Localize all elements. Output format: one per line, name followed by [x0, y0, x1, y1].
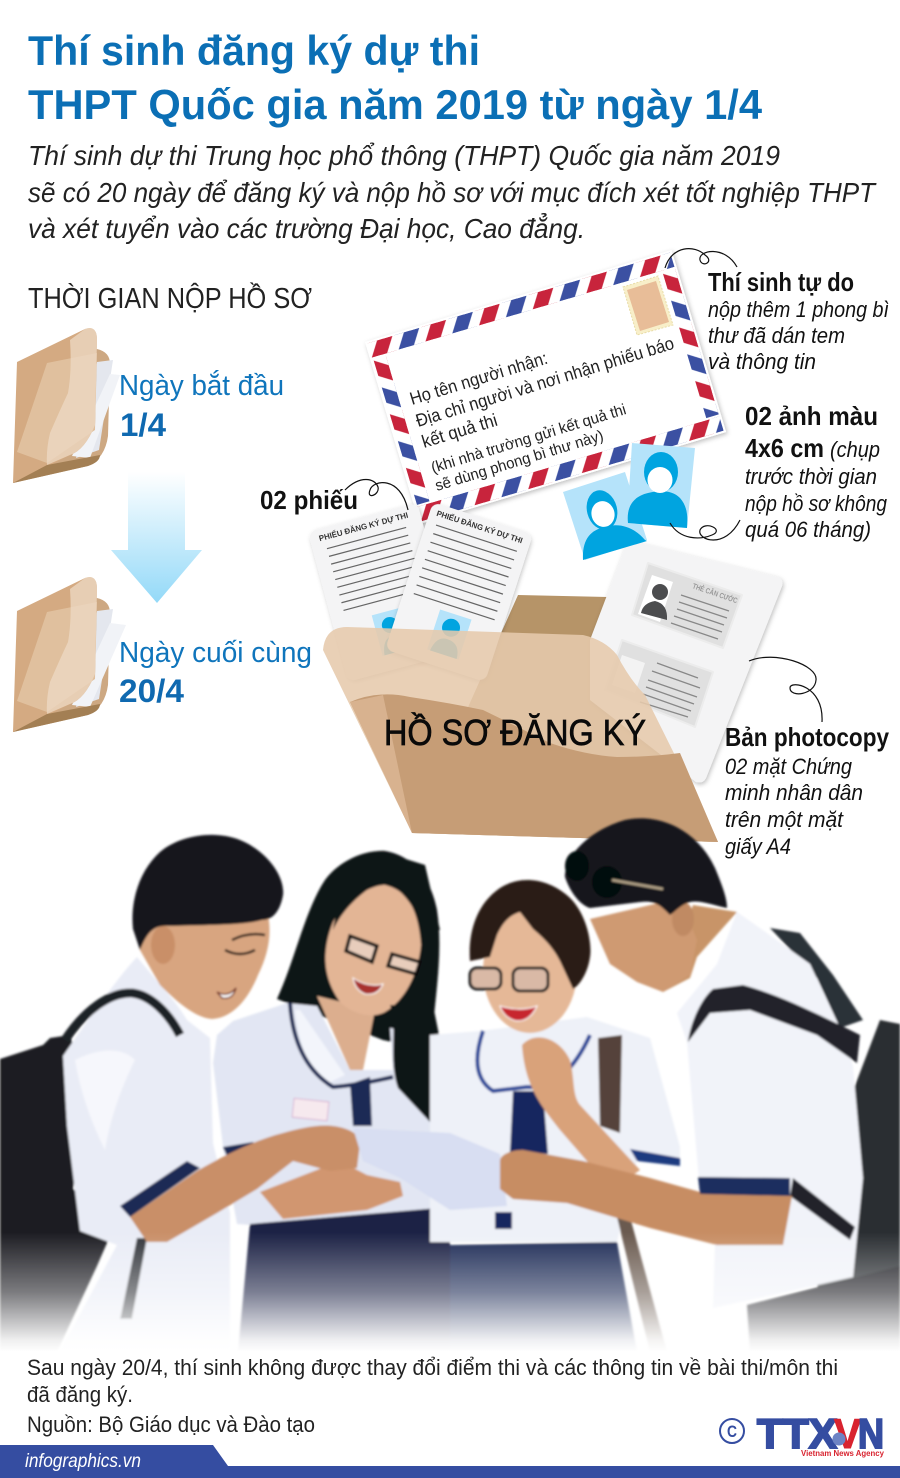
label: photos: 02 ảnh màu: [745, 401, 878, 431]
label: photocopy: 02 mặt Chứng: [725, 754, 853, 779]
icon: small folder end: [13, 577, 126, 732]
student: right boy: [565, 818, 900, 1352]
form left: [308, 503, 457, 682]
id card back: [605, 640, 713, 727]
student: girl with glasses: [430, 880, 680, 1352]
form right: PHIẾU ĐĂNG KÝ DỰ THI: [435, 508, 524, 545]
envelope address text: [407, 333, 676, 495]
footer site name: infographics.vn: [25, 1451, 141, 1472]
photocopy sheet: [590, 540, 782, 782]
folder front: HỒ SƠ ĐĂNG KÝ: [384, 711, 646, 753]
photo fade: [0, 1232, 900, 1363]
label: free envelope: Thí sinh tự do: [708, 267, 854, 297]
callout line: photos: [670, 520, 740, 540]
logo: TTXVN: C: [727, 1422, 737, 1441]
intro text: Thí sinh dự thi Trung học phổ thông (THPT) Quốc gia năm 2019: [28, 140, 780, 171]
label: photocopy: giấy A4: [725, 834, 791, 859]
footer note: đã đăng ký.: [27, 1382, 133, 1407]
intro text: và xét tuyển vào các trường Đại học, Cao đẳng.: [28, 212, 585, 244]
label: start date: [119, 369, 284, 443]
label: free envelope: thư đã dán tem: [708, 323, 845, 348]
form right: [385, 502, 533, 682]
envelope address text: Họ tên người nhận:: [407, 348, 550, 409]
envelope address text: kết quả thi: [419, 410, 500, 452]
footer bar: [0, 1445, 900, 1478]
portrait photos: [563, 443, 695, 560]
label: free envelope: [708, 267, 889, 374]
label: photocopy: minh nhân dân: [725, 780, 863, 805]
folder back: [412, 595, 718, 842]
arrow: down: [111, 472, 202, 603]
title: Thí sinh đăng ký dự thi: [28, 27, 480, 74]
student: left boy: [0, 835, 283, 1352]
stamp: [623, 276, 673, 335]
logo: TTXVN: Vietnam News Agency: [801, 1448, 884, 1458]
label: photos: 4x6 cm: [745, 433, 824, 463]
label: two forms: 02 phiếu: [260, 485, 358, 515]
label: end date: [119, 637, 312, 709]
arm: left boy: [130, 1125, 360, 1242]
title: THPT Quốc gia năm 2019 từ ngày 1/4: [28, 81, 763, 128]
envelope: [365, 250, 726, 524]
label: photos: trước thời gian: [745, 464, 877, 489]
logo: TTXVN: N: [858, 1410, 884, 1457]
envelope address text: Địa chỉ người và nơi nhận phiếu báo: [413, 333, 676, 431]
student: girl with long hair: [213, 851, 470, 1352]
label: start date: Ngày bắt đầu: [119, 369, 284, 402]
label: photocopy: trên một mặt: [725, 807, 844, 832]
cuff: left boy: [120, 1161, 200, 1217]
envelope address text: (khi nhà trường gửi kết quả thi: [429, 401, 628, 477]
arm: right boy: [500, 1150, 792, 1245]
label: start date: 1/4: [120, 407, 166, 443]
label: end date: Ngày cuối cùng: [119, 637, 312, 669]
label: photos: [745, 401, 888, 542]
logo: TTXVN: TTX: [757, 1410, 837, 1457]
label: end date: 20/4: [119, 673, 184, 709]
footer note: Sau ngày 20/4, thí sinh không được thay đổi điểm thi và các thông tin về bài thi/môn thi: [27, 1355, 838, 1380]
label: free envelope: và thông tin: [708, 349, 816, 374]
title: [28, 27, 763, 128]
label: photos: quá 06 tháng): [745, 517, 871, 542]
label: photocopy: [725, 722, 889, 859]
logo: TTXVN: V: [834, 1410, 861, 1457]
cuff: right boy: [698, 1177, 790, 1196]
source: Nguồn: Bộ Giáo dục và Đào tạo: [27, 1412, 315, 1437]
paper held by students: [353, 1128, 507, 1210]
form left: PHIẾU ĐĂNG KÝ DỰ THI: [318, 510, 409, 543]
callout line: forms: [345, 480, 408, 510]
folder front: [323, 627, 718, 842]
intro text: [28, 140, 877, 244]
callout line: envelope: [665, 249, 737, 268]
id card front: THẺ CĂN CƯỚC: [691, 581, 739, 605]
icon: small folder start: [13, 328, 120, 483]
callout line: photocopy: [749, 657, 822, 722]
logo: TTXVN: [720, 1410, 884, 1458]
heading: submission time: THỜI GIAN NỘP HỒ SƠ: [28, 281, 312, 315]
label: photos: (chụp: [830, 437, 880, 462]
envelope address text: sẽ dùng phong bì thư này): [433, 427, 606, 495]
footer note: [27, 1355, 838, 1407]
id card front: [632, 563, 742, 648]
students photo: [0, 818, 900, 1352]
